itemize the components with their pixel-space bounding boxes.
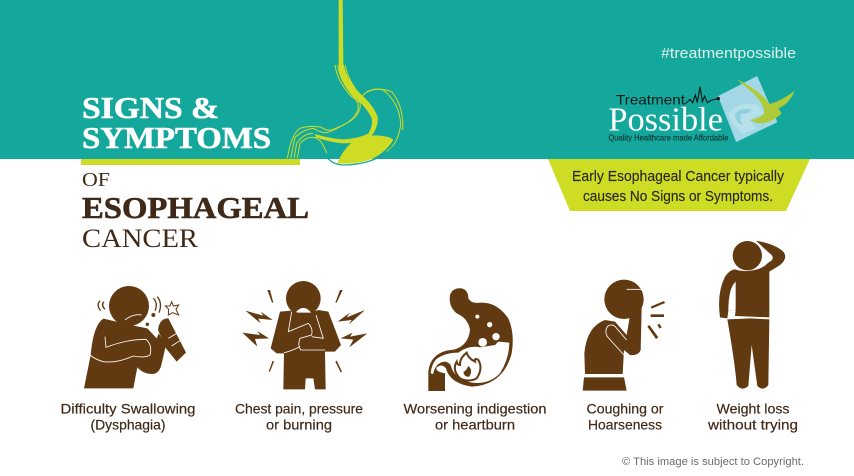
flame [455,353,480,380]
copyright note: © This image is subject to Copyright. [622,456,804,468]
icon: difficulty swallowing [84,286,186,388]
title: signs and symptoms: SYMPTOMS [82,120,271,155]
labels: symptom captions: Coughing or [586,400,664,416]
labels: symptom captions: Difficulty Swallowing [60,400,196,416]
pain sparks [242,290,367,372]
logo: treatment possible: Quality Healthcare made Affordable [608,133,729,143]
labels: symptom captions [60,400,798,432]
subtitle: of esophageal cancer: ESOPHAGEAL [82,190,309,225]
logo wordmark: Treatment [616,91,685,107]
labels: symptom captions: or burning [266,416,332,432]
callout: early esophageal cancer [548,159,810,211]
callout: early esophageal cancer: Early Esophageal Cancer typically [572,169,785,185]
icon: chest pain [242,281,367,389]
logo bird [737,79,795,123]
subtitle: of esophageal cancer: OF [82,169,110,191]
stomach illustration [287,0,403,165]
labels: symptom captions: Hoarseness [588,416,662,432]
icon: indigestion stomach [428,288,513,391]
logo pulse line [685,87,718,104]
labels: symptom captions: (Dysphagia) [90,416,166,432]
lime title underline [81,159,300,165]
icon: weight loss [719,241,785,389]
logo globe card [719,77,776,141]
subtitle: of esophageal cancer: CANCER [82,224,199,253]
teal header band [0,0,854,159]
labels: symptom captions: Chest pain, pressure [235,400,363,416]
labels: symptom captions: without trying [707,416,798,432]
labels: symptom captions: Weight loss [716,400,790,416]
title: signs and symptoms [82,90,271,155]
icon: coughing [583,280,665,391]
callout: early esophageal cancer: causes No Signs or Symptoms. [583,189,773,205]
logo: treatment possible: Possible [608,102,723,139]
logo: treatment possible [608,77,795,143]
hashtag: #treatmentpossible [661,45,796,62]
labels: symptom captions: Worsening indigestion [404,400,546,416]
subtitle: of esophageal cancer [82,169,309,253]
labels: symptom captions: or heartburn [435,416,515,432]
title: signs and symptoms: SIGNS & [82,90,219,125]
